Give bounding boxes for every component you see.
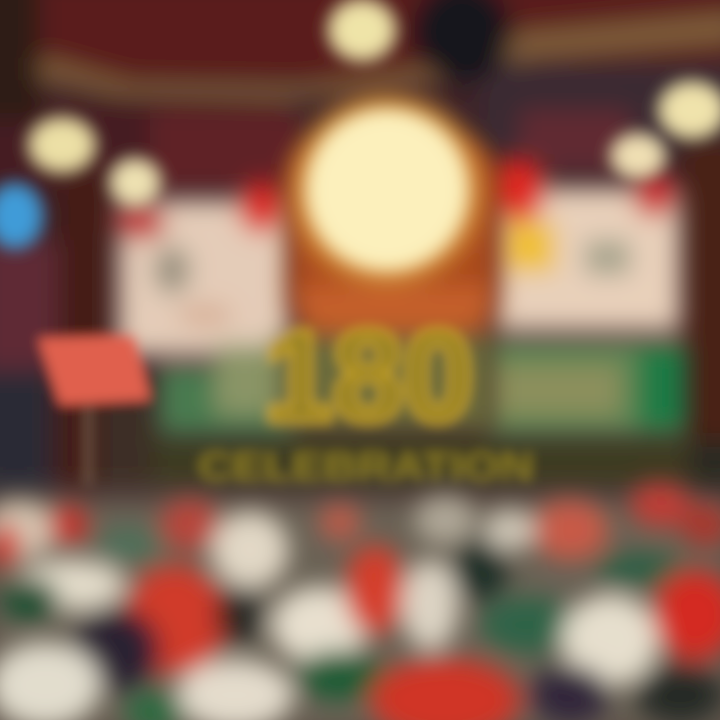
clock face bbox=[293, 96, 481, 284]
subtitle: CELEBRATION bbox=[198, 445, 534, 489]
hanging lights bbox=[29, 0, 720, 205]
big number: 180 bbox=[263, 305, 473, 448]
blue light bbox=[0, 184, 42, 248]
left banner bbox=[114, 181, 293, 435]
crowd bbox=[0, 483, 720, 720]
right pillar bbox=[680, 140, 720, 490]
ceiling bbox=[0, 0, 720, 190]
red sign bbox=[38, 335, 150, 485]
clock surround bbox=[278, 140, 498, 430]
left wall bbox=[0, 170, 160, 500]
right banner bbox=[490, 158, 686, 435]
lower dark band bbox=[150, 435, 690, 490]
